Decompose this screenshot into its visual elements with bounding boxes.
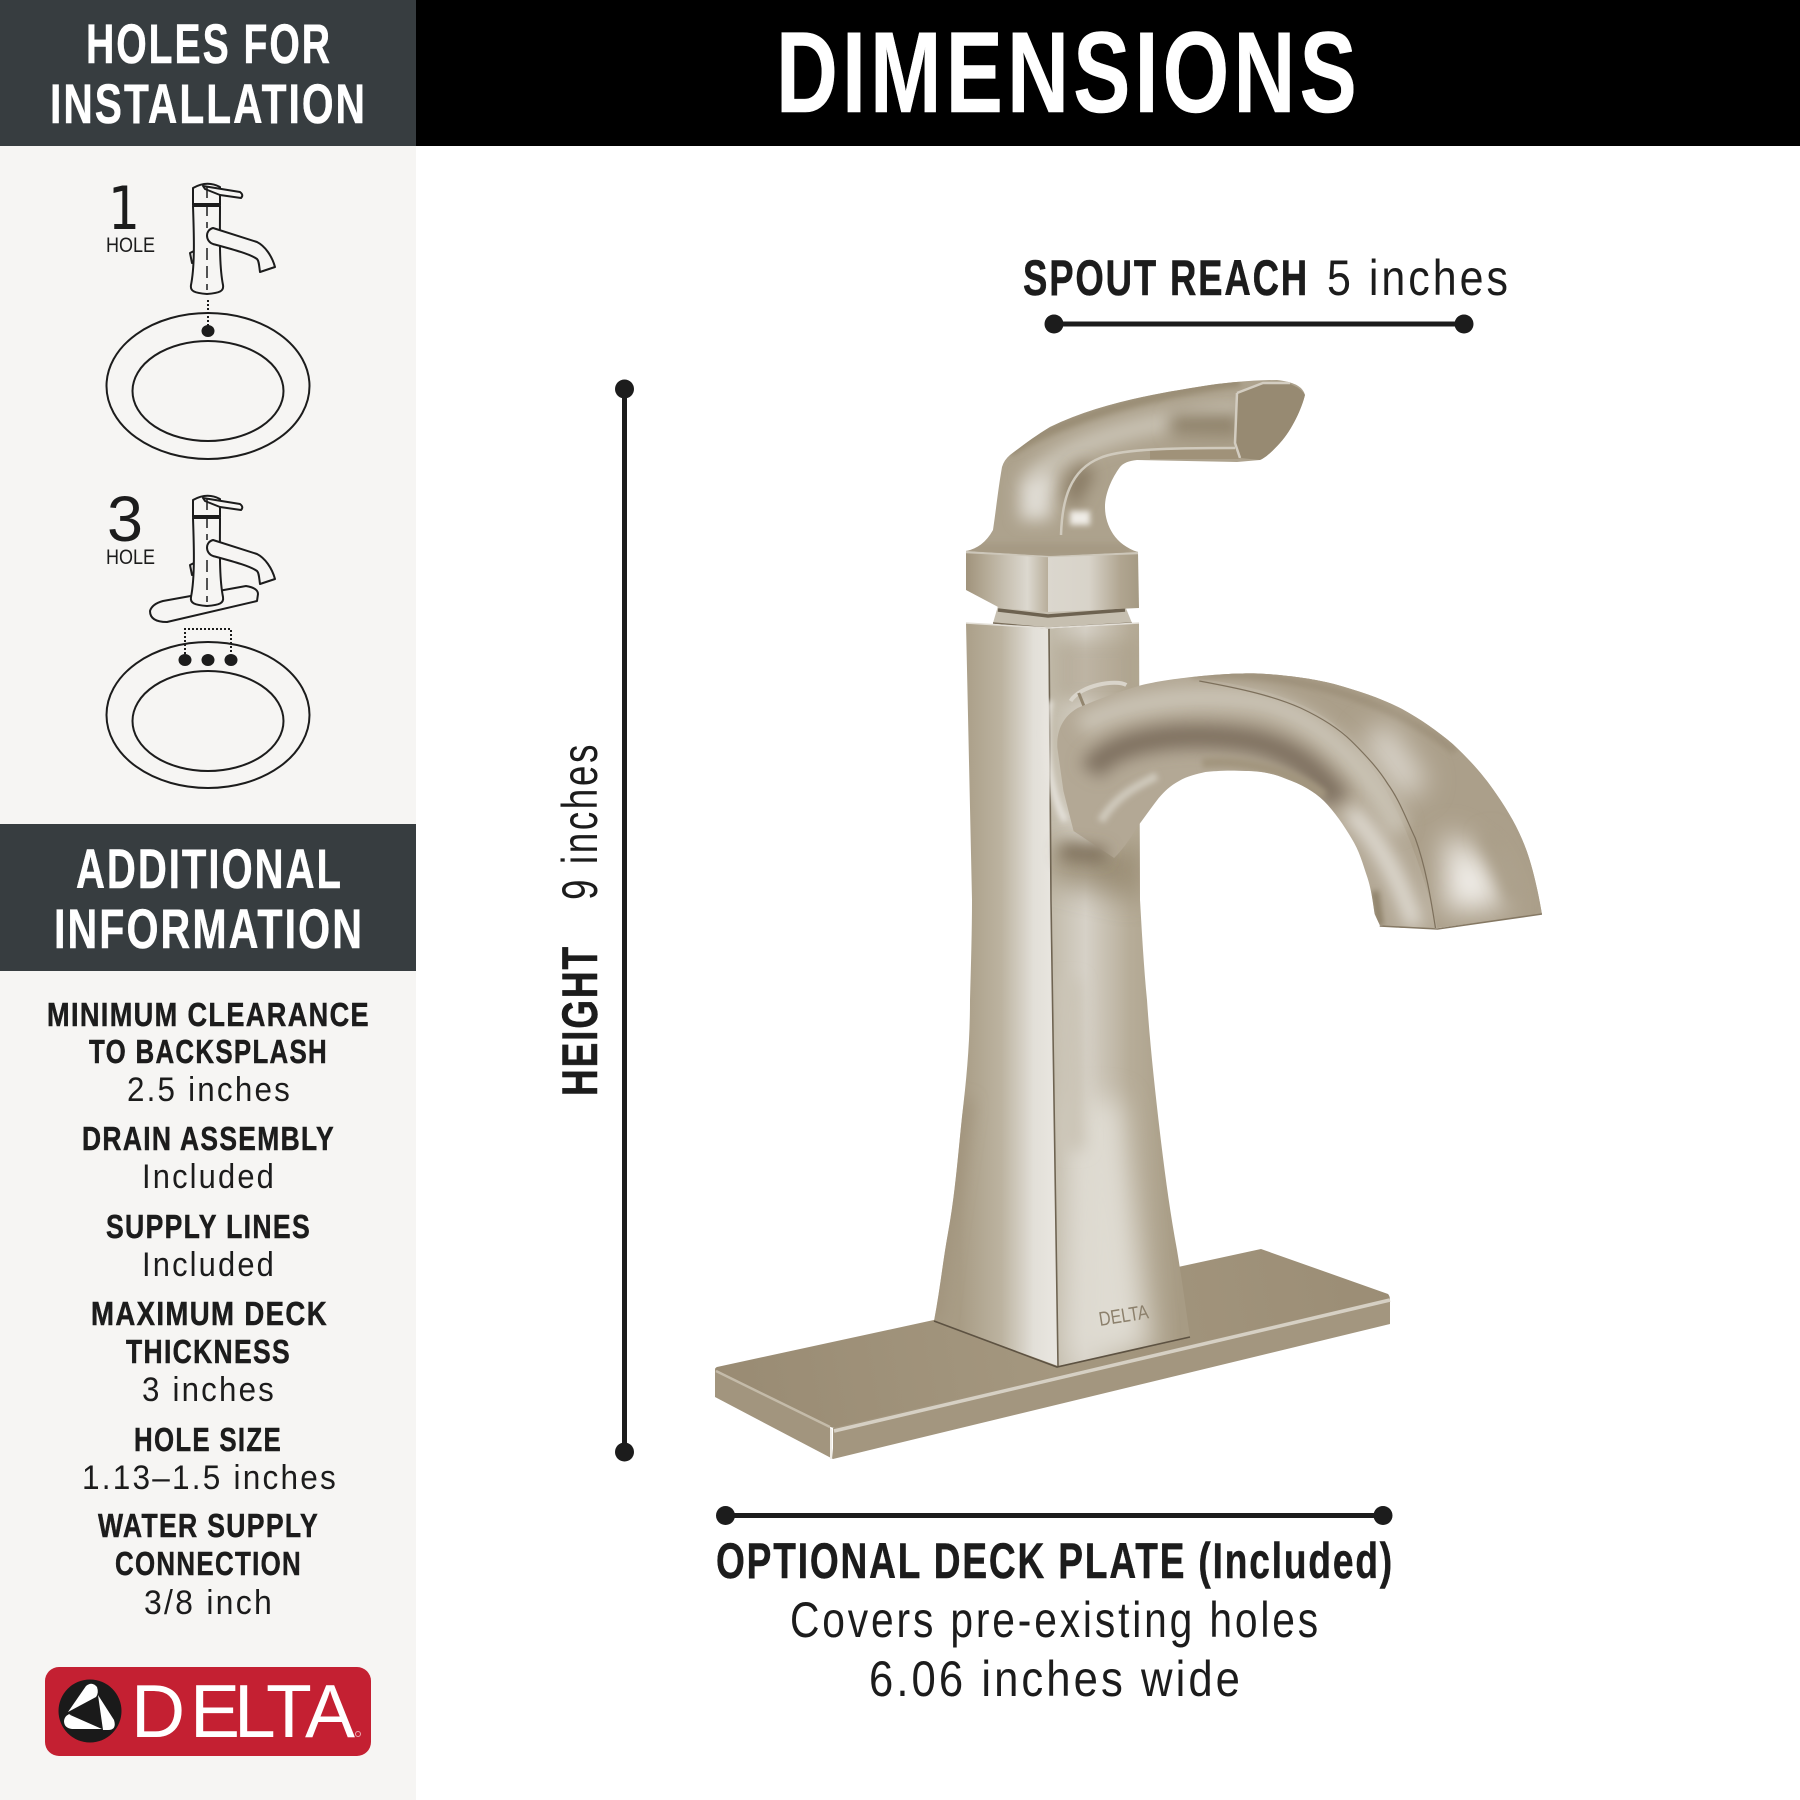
header band: dimensions: DIMENSIONS bbox=[776, 9, 1361, 137]
icon: three hole sink bbox=[106, 629, 310, 788]
body: shading and centre edge bbox=[934, 628, 1190, 1367]
label: 3 hole bbox=[106, 483, 155, 569]
neck ring bbox=[993, 606, 1132, 628]
label: 3 hole: HOLE bbox=[106, 546, 155, 569]
spout bbox=[1047, 661, 1552, 931]
arrow: height dimension line bbox=[615, 380, 634, 1462]
label: 1 hole: 1 bbox=[108, 174, 140, 244]
arrow: deck plate dimension line bbox=[716, 1506, 1392, 1525]
collar bbox=[966, 551, 1139, 612]
body: left face bbox=[934, 623, 1058, 1366]
text block: water supply connection bbox=[98, 1507, 319, 1622]
label: optional deck plate: Covers pre-existing holes bbox=[790, 1592, 1321, 1648]
label: spout reach: 5 inches bbox=[1327, 250, 1511, 306]
text block: water supply connection: CONNECTION bbox=[115, 1545, 302, 1582]
label: optional deck plate: OPTIONAL DECK PLATE (Included) bbox=[716, 1533, 1394, 1589]
label: spout reach: SPOUT REACH bbox=[1023, 250, 1309, 306]
text block: minimum clearance: TO BACKSPLASH bbox=[89, 1033, 328, 1070]
body: right face bbox=[1048, 623, 1190, 1366]
icon: single hole faucet bbox=[190, 184, 275, 294]
label: 1 hole bbox=[106, 174, 155, 257]
spout joint ring bbox=[1071, 683, 1126, 701]
logo: delta: DELTA bbox=[131, 1669, 355, 1753]
label: 3 hole: 3 bbox=[107, 483, 143, 555]
text block: maximum deck thickness: THICKNESS bbox=[126, 1333, 291, 1370]
icon: three hole faucet with deck plate bbox=[150, 496, 275, 622]
text block: hole size: HOLE SIZE bbox=[134, 1421, 282, 1458]
text block: minimum clearance: 2.5 inches bbox=[127, 1071, 292, 1109]
label: height: 9 inches bbox=[552, 742, 608, 900]
text block: supply lines bbox=[106, 1208, 311, 1284]
text block: maximum deck thickness: MAXIMUM DECK bbox=[91, 1295, 328, 1332]
label: height bbox=[552, 742, 608, 1096]
heading: holes for installation: HOLES FOR bbox=[86, 12, 332, 75]
text block: drain assembly: DRAIN ASSEMBLY bbox=[82, 1120, 335, 1157]
engraved brand mark: DELTA bbox=[1097, 1301, 1151, 1331]
heading: holes for installation bbox=[0, 0, 416, 146]
handle bbox=[966, 380, 1305, 556]
text block: minimum clearance bbox=[47, 996, 370, 1109]
header band: dimensions bbox=[416, 0, 1800, 146]
body top edge bbox=[966, 623, 1139, 628]
text block: hole size bbox=[82, 1421, 338, 1497]
text block: drain assembly bbox=[82, 1120, 335, 1196]
text block: maximum deck thickness bbox=[91, 1295, 328, 1409]
logo: delta bbox=[45, 1667, 371, 1756]
text block: maximum deck thickness: 3 inches bbox=[142, 1371, 276, 1409]
icon: single hole sink bbox=[106, 300, 310, 459]
panel: left sidebar bbox=[0, 0, 416, 1800]
text block: hole size: 1.13–1.5 inches bbox=[82, 1459, 338, 1497]
label: 1 hole: HOLE bbox=[106, 234, 155, 257]
heading: additional information: INFORMATION bbox=[54, 897, 364, 960]
heading: holes for installation: INSTALLATION bbox=[50, 72, 367, 135]
label: optional deck plate bbox=[716, 1533, 1394, 1707]
text block: water supply connection: WATER SUPPLY bbox=[98, 1507, 319, 1544]
arrow: spout reach dimension line bbox=[1044, 314, 1474, 334]
text block: water supply connection: 3/8 inch bbox=[144, 1584, 274, 1622]
text block: drain assembly: Included bbox=[142, 1158, 276, 1196]
label: height: HEIGHT bbox=[552, 945, 608, 1096]
text block: supply lines: SUPPLY LINES bbox=[106, 1208, 311, 1245]
deck plate bbox=[715, 1249, 1390, 1459]
text block: supply lines: Included bbox=[142, 1246, 276, 1284]
faucet: main product bbox=[715, 380, 1552, 1459]
label: optional deck plate: 6.06 inches wide bbox=[869, 1651, 1243, 1707]
heading: additional information: ADDITIONAL bbox=[76, 837, 343, 900]
heading: additional information bbox=[0, 824, 416, 971]
text block: minimum clearance: MINIMUM CLEARANCE bbox=[47, 996, 370, 1033]
